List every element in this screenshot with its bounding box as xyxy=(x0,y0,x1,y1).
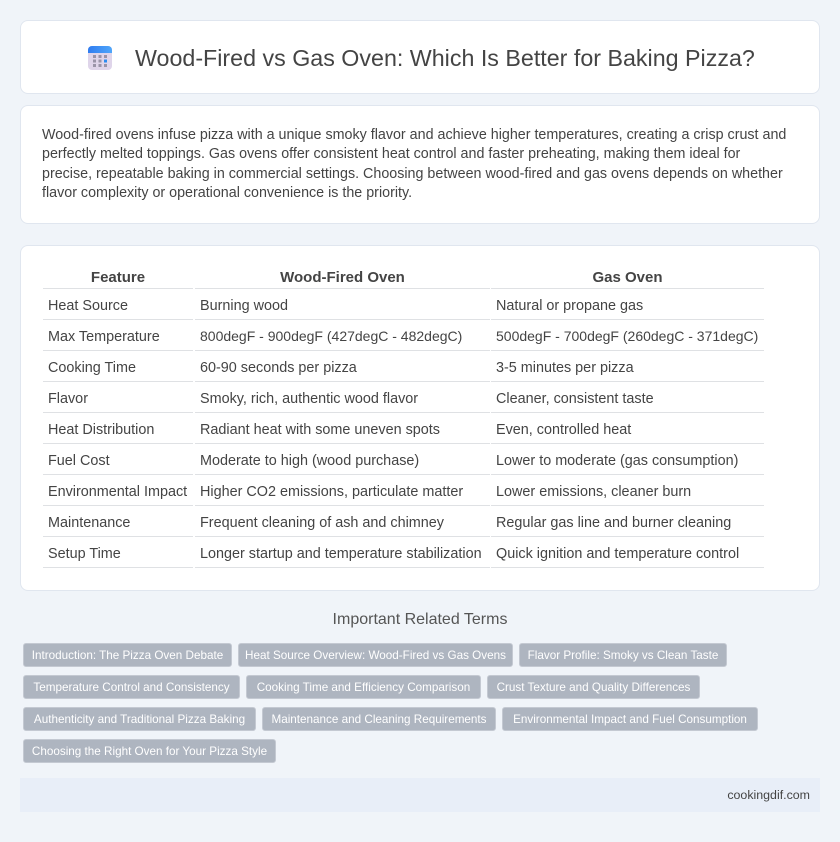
comparison table: Cooking Time xyxy=(48,360,136,376)
panel: comparison table xyxy=(20,245,820,591)
comparison table: Cleaner, consistent taste xyxy=(496,391,654,407)
related term tags: Cooking Time and Efficiency Comparison xyxy=(257,681,470,694)
title: Wood-Fired vs Gas Oven: Which Is Better for Baking Pizza? xyxy=(135,45,755,71)
comparison table: 800degF - 900degF (427degC - 482degC) xyxy=(200,328,462,344)
comparison table: Quick ignition and temperature control xyxy=(496,546,739,562)
intro text: perfectly melted toppings. Gas ovens offer consistent heat control and faster preheating, making them ideal for xyxy=(42,146,740,162)
comparison table: Smoky, rich, authentic wood flavor xyxy=(200,391,418,407)
comparison table: Heat Source xyxy=(48,298,128,314)
table header: Wood-Fired Oven xyxy=(280,269,405,286)
comparison table: Maintenance xyxy=(48,515,130,531)
related term tags: Introduction: The Pizza Oven Debate xyxy=(32,649,223,662)
related term tags: Authenticity and Traditional Pizza Baking xyxy=(34,713,245,726)
comparison table: Frequent cleaning of ash and chimney xyxy=(200,515,444,531)
table header: Feature xyxy=(91,269,145,286)
related term tags: Heat Source Overview: Wood-Fired vs Gas Ovens xyxy=(245,649,506,662)
related term tags xyxy=(23,643,758,763)
table header xyxy=(91,269,663,286)
comparison table: 3-5 minutes per pizza xyxy=(496,360,634,376)
panel: header xyxy=(20,20,820,94)
related term tags: Choosing the Right Oven for Your Pizza Style xyxy=(32,745,267,758)
intro text: precise, repeatable baking in commercial settings. Choosing between wood-fired and gas ovens depends on whether xyxy=(42,166,783,182)
comparison table: Lower to moderate (gas consumption) xyxy=(496,453,738,469)
comparison table: Regular gas line and burner cleaning xyxy=(496,515,731,531)
comparison table: Setup Time xyxy=(48,546,121,562)
comparison table: Heat Distribution xyxy=(48,422,154,438)
intro text: flavor complexity or operational convenience is the priority. xyxy=(42,185,412,201)
comparison table: 500degF - 700degF (260degC - 371degC) xyxy=(496,328,758,344)
comparison table: Max Temperature xyxy=(48,329,160,345)
related term tags: Temperature Control and Consistency xyxy=(33,681,230,694)
related term tags: Crust Texture and Quality Differences xyxy=(497,681,690,694)
related term tags: Maintenance and Cleaning Requirements xyxy=(271,713,487,726)
comparison table xyxy=(43,269,764,568)
related term tags: Environmental Impact and Fuel Consumption xyxy=(513,713,747,726)
comparison table: 60-90 seconds per pizza xyxy=(200,360,357,376)
comparison table: Environmental Impact xyxy=(48,484,187,500)
intro text xyxy=(42,127,786,201)
footer source: cookingdif.com xyxy=(727,788,810,802)
panel: intro paragraph xyxy=(20,105,820,224)
footer xyxy=(20,778,820,812)
icon: calendar xyxy=(88,46,112,70)
intro text: Wood-fired ovens infuse pizza with a unique smoky flavor and achieve higher temperatures, creating a crisp crust and xyxy=(42,127,786,143)
comparison table: Fuel Cost xyxy=(48,453,110,469)
comparison table: Burning wood xyxy=(200,298,288,314)
comparison table: Radiant heat with some uneven spots xyxy=(200,422,440,438)
comparison table: Lower emissions, cleaner burn xyxy=(496,484,691,500)
comparison table: Flavor xyxy=(48,391,88,407)
comparison table: Moderate to high (wood purchase) xyxy=(200,453,419,469)
table header: Gas Oven xyxy=(592,269,663,286)
comparison table: Higher CO2 emissions, particulate matter xyxy=(200,484,463,500)
related term tags: Flavor Profile: Smoky vs Clean Taste xyxy=(528,649,718,662)
heading: related terms: Important Related Terms xyxy=(333,611,507,628)
comparison table: Longer startup and temperature stabilization xyxy=(200,546,482,562)
comparison table: Natural or propane gas xyxy=(496,298,643,314)
comparison table: Even, controlled heat xyxy=(496,422,631,438)
